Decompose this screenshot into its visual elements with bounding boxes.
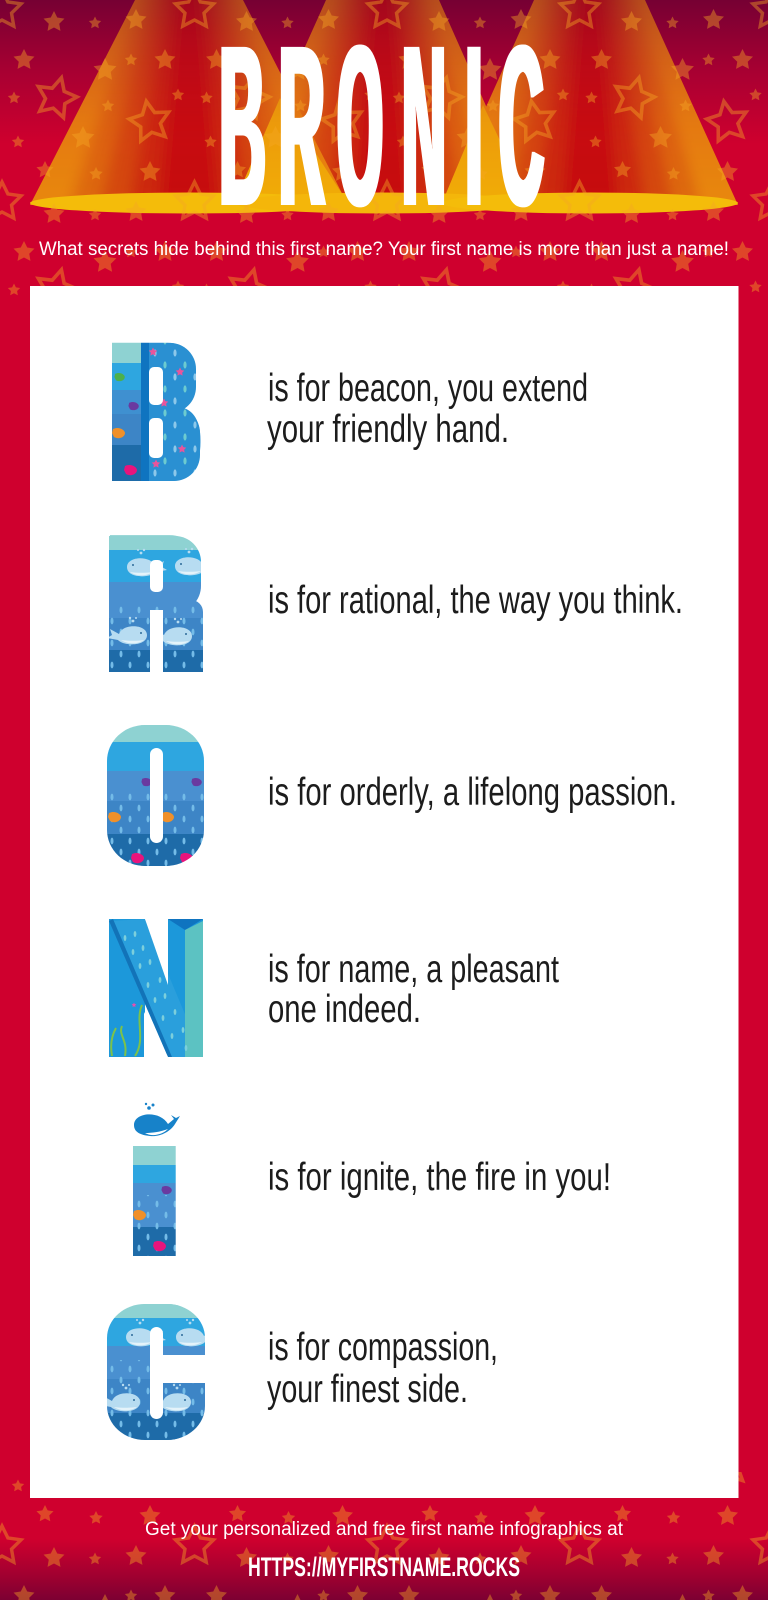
title: C [497, 5, 546, 277]
subtitle: What secrets hide behind this first name? Your first name is more than just a name! [39, 239, 729, 260]
footer url: HTTPS://MYFIRSTNAME.ROCKS [248, 1552, 520, 1582]
text: B: your friendly hand. [267, 408, 509, 451]
text: C: your finest side. [267, 1368, 468, 1411]
letter I [133, 1146, 176, 1256]
title: R [276, 5, 326, 277]
text: N: one indeed. [268, 988, 421, 1031]
title: O [336, 5, 385, 277]
title: B [217, 5, 266, 277]
footer text: Get your personalized and free first name infographics at [145, 1519, 624, 1540]
text: C: is for compassion, [268, 1326, 498, 1369]
letter R [109, 535, 203, 672]
text: B: is for beacon, you extend [268, 367, 588, 410]
panel: letters [30, 286, 738, 1498]
icon: whale above I [134, 1103, 180, 1136]
text: N: is for name, a pleasant [268, 948, 559, 991]
spotlights [30, 0, 738, 214]
letter C [107, 1304, 205, 1440]
letter B [112, 342, 200, 481]
text: B [267, 367, 588, 451]
letter O [107, 725, 204, 866]
text: C [267, 1326, 498, 1411]
title: I [463, 0, 485, 255]
title [217, 0, 546, 277]
letter N [109, 919, 203, 1057]
text: I: is for ignite, the fire in you! [268, 1156, 611, 1199]
text: N [268, 948, 559, 1031]
title: N [400, 5, 448, 277]
